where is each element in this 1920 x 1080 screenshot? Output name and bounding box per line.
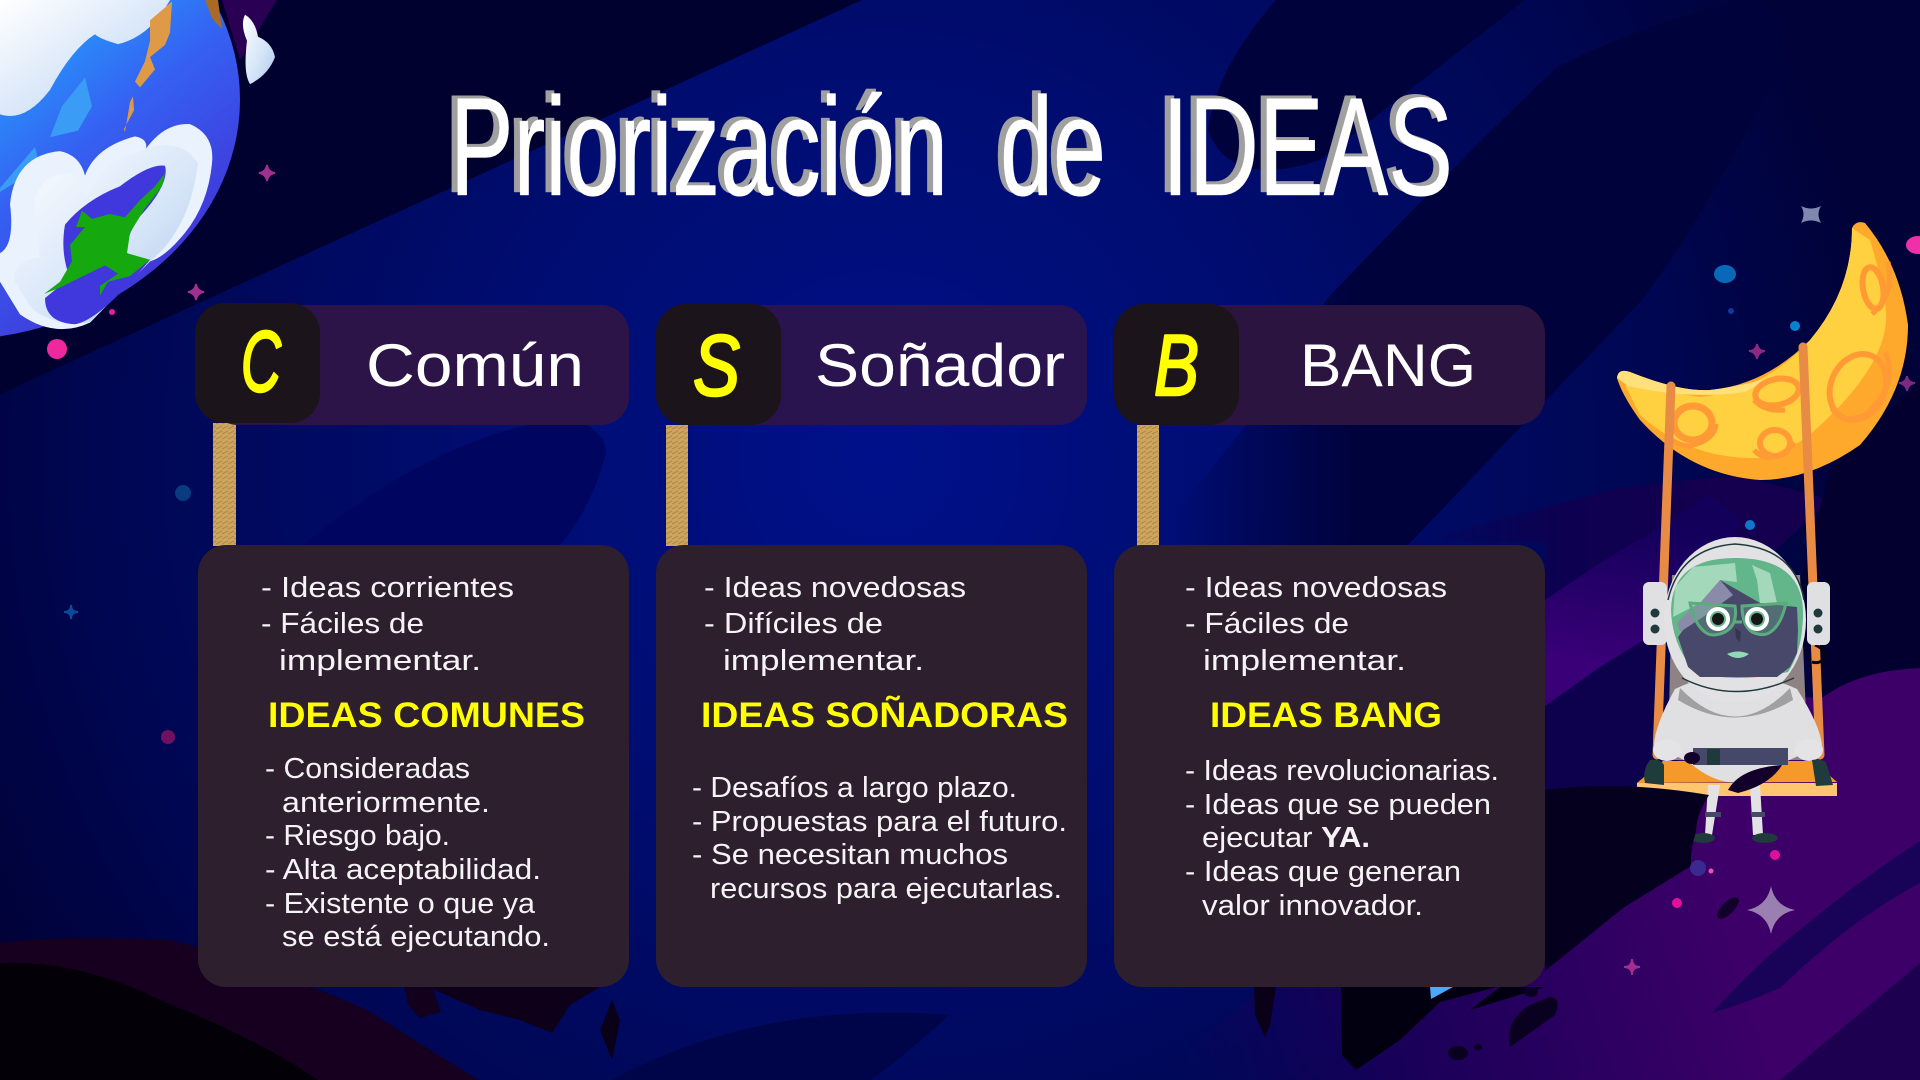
belt	[1693, 748, 1788, 765]
text: características: implementar.	[1203, 645, 1406, 677]
text: detalles	[265, 753, 550, 953]
decorative dots and stars right	[1624, 206, 1920, 975]
badge B	[1114, 304, 1239, 425]
header: soñador	[656, 304, 1087, 425]
backpack	[1668, 575, 1808, 760]
heading: ideas comunes: IDEAS COMUNES	[268, 696, 585, 735]
label soñador: Soñador	[815, 332, 1065, 399]
text: detalles: - Ideas que se pueden	[1185, 789, 1491, 821]
label común: Común	[366, 332, 584, 399]
rope: común	[213, 423, 236, 546]
text: detalles: - Alta aceptabilidad.	[265, 854, 541, 886]
ocean patches	[0, 78, 92, 192]
header: bang	[1114, 304, 1545, 425]
title: de	[1000, 68, 1106, 225]
lips	[1727, 652, 1749, 658]
text: detalles: - Desafíos a largo plazo.	[692, 772, 1017, 804]
blue tip below panel	[1430, 987, 1453, 999]
visor	[1671, 558, 1803, 678]
text: características: - Fáciles de	[1185, 608, 1349, 640]
title: IDEAS	[1156, 65, 1447, 222]
text: detalles: - Riesgo bajo.	[265, 820, 450, 852]
legs	[1691, 785, 1778, 843]
helmet	[1664, 537, 1806, 703]
panel: ideas comunes	[198, 545, 629, 987]
text: detalles: - Propuestas para el futuro.	[692, 806, 1067, 838]
craters	[1672, 262, 1897, 458]
text: detalles: recursos para ejecutarlas.	[710, 873, 1062, 905]
hook	[1812, 645, 1824, 663]
panel: ideas soñadoras	[656, 545, 1087, 987]
text: detalles: anteriormente.	[282, 787, 490, 819]
text: detalles	[1185, 755, 1499, 922]
heading: ideas soñadoras: IDEAS SOÑADORAS	[701, 696, 1068, 735]
badge S	[656, 304, 781, 425]
text: características	[261, 572, 514, 677]
text: características	[1185, 572, 1447, 677]
small cloud	[243, 15, 275, 84]
plants bottom left	[0, 938, 620, 1080]
text: detalles: - Ideas que generan	[1185, 856, 1461, 888]
text: características	[704, 572, 966, 677]
glasses and eyes	[1690, 603, 1786, 635]
panel: ideas bang	[1114, 545, 1545, 987]
title: de	[994, 65, 1100, 222]
green continent	[44, 173, 165, 296]
lower cloud	[0, 124, 212, 329]
title: IDEAS	[1162, 68, 1453, 225]
text: detalles: - Ideas revolucionarias.	[1185, 755, 1499, 787]
gloves	[1644, 760, 1833, 786]
brown land	[124, 2, 172, 132]
text: características: - Ideas novedosas	[704, 572, 966, 604]
text: detalles: ejecutar YA.	[1202, 822, 1370, 854]
rope: soñador	[666, 425, 688, 546]
text: características: implementar.	[279, 645, 481, 677]
text: características: - Ideas novedosas	[1185, 572, 1447, 604]
decorative stars and dots left	[47, 165, 275, 744]
text: detalles	[692, 772, 1067, 905]
text: detalles: - Existente o que ya	[265, 888, 536, 920]
suit body	[1654, 674, 1822, 782]
text: detalles: - Consideradas	[265, 753, 470, 785]
collar shading	[1678, 688, 1793, 718]
text: características: - Ideas corrientes	[261, 572, 514, 604]
text: detalles: - Se necesitan muchos	[692, 839, 1008, 871]
title: Priorización	[444, 65, 942, 222]
text: detalles: se está ejecutando.	[282, 921, 550, 953]
swing ropes	[1657, 347, 1820, 755]
swing seat	[1637, 761, 1837, 796]
text: detalles: valor innovador.	[1202, 890, 1423, 922]
badge S: S	[693, 318, 740, 414]
dark leaves in front of astronaut	[1545, 752, 1782, 971]
label bang: BANG	[1300, 332, 1476, 399]
text: características: - Difíciles de	[704, 608, 883, 640]
rope: bang	[1137, 425, 1159, 546]
text: características: implementar.	[723, 645, 924, 677]
ear boxes	[1643, 582, 1830, 645]
ocean under clouds	[45, 166, 166, 324]
header: común	[195, 303, 629, 425]
badge C: C	[241, 314, 282, 410]
planet earth	[0, 0, 275, 341]
moon	[1617, 222, 1908, 480]
plants bottom right	[1254, 987, 1558, 1070]
top cloud	[0, 0, 170, 116]
title: Priorización	[450, 68, 948, 225]
nose	[1735, 628, 1741, 642]
astronaut on swing	[1637, 537, 1837, 843]
badge B: B	[1154, 318, 1199, 414]
dots and big star lower right	[1672, 850, 1795, 934]
text: características: - Fáciles de	[261, 608, 424, 640]
heading: ideas bang: IDEAS BANG	[1210, 696, 1442, 735]
arms	[1653, 739, 1823, 761]
badge C	[195, 303, 320, 423]
